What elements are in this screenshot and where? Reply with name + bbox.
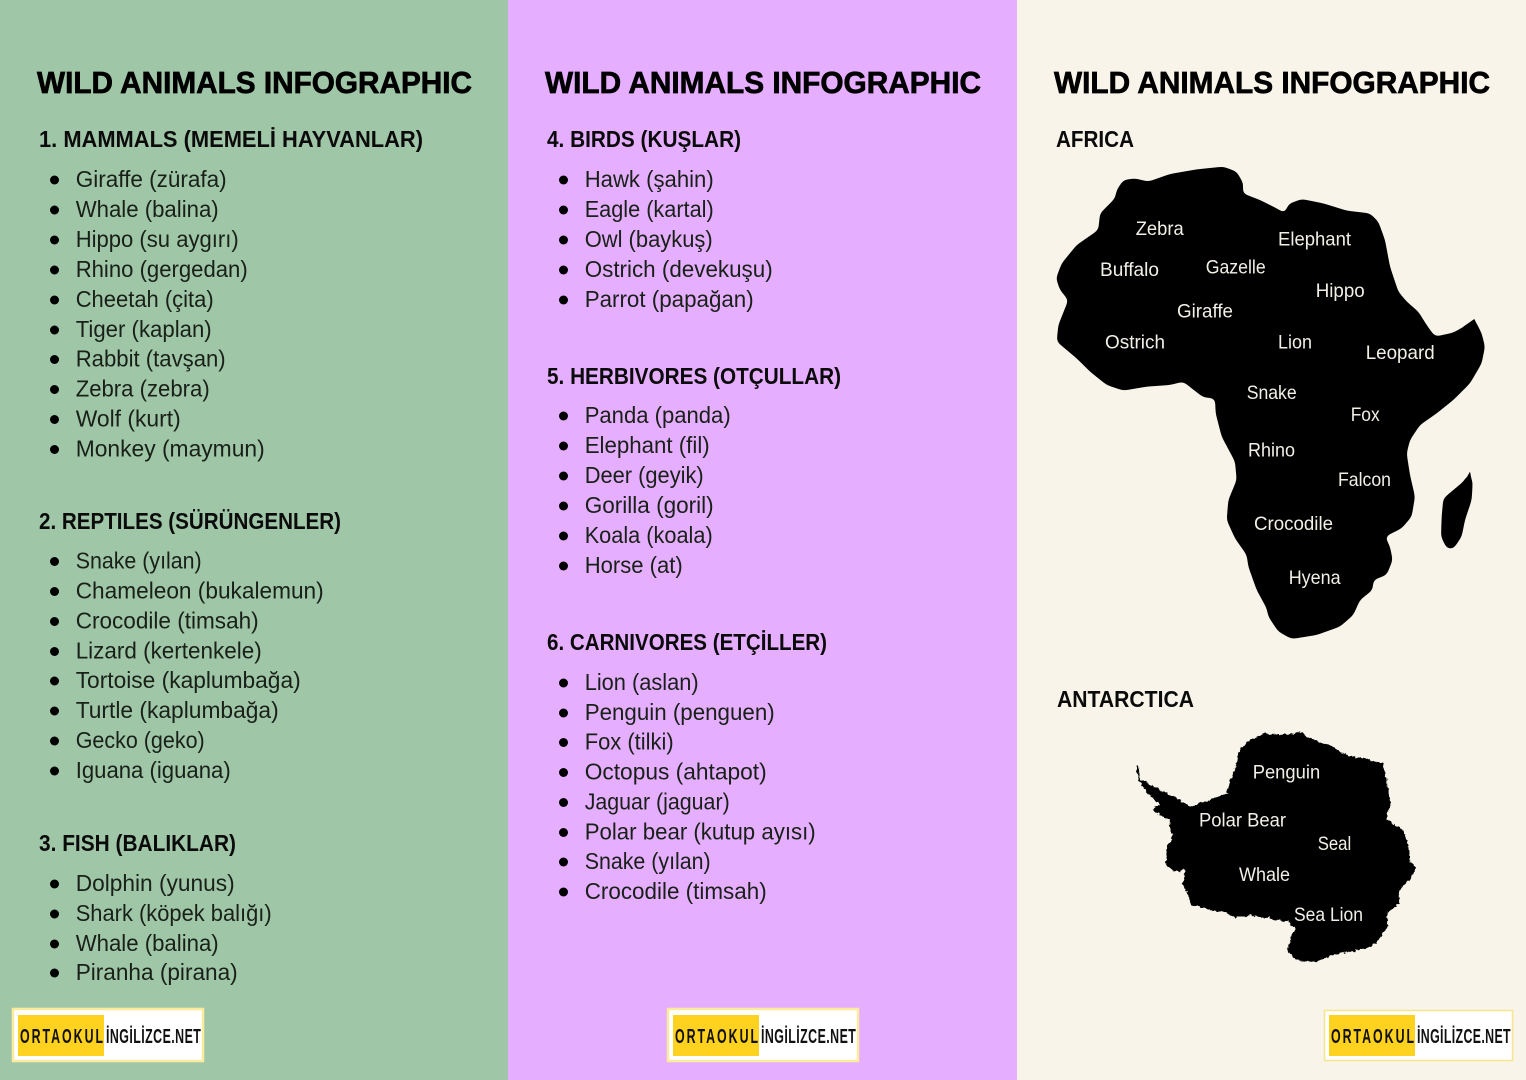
list: mammals: Zebra (zebra) — [76, 376, 210, 402]
map: antarctica: Polar Bear — [1199, 810, 1286, 832]
panel: birds, herbivores and carnivores — [508, 0, 1017, 1080]
list: mammals: Wolf (kurt) — [76, 406, 181, 432]
map: africa: Rhino — [1248, 440, 1295, 462]
list: fish: Dolphin (yunus) — [76, 870, 235, 896]
list: carnivores: Penguin (penguen) — [585, 699, 775, 725]
list: reptiles — [50, 548, 324, 783]
panel: continents — [1017, 0, 1526, 1080]
map: africa: Leopard — [1366, 342, 1435, 364]
list: herbivores: Elephant (fil) — [585, 432, 710, 458]
map: africa: Zebra — [1136, 218, 1184, 240]
map: antarctica — [1137, 733, 1416, 962]
logo: right — [1324, 1010, 1512, 1060]
list: mammals: Hippo (su aygırı) — [76, 226, 239, 252]
list: reptiles: Gecko (geko) — [76, 727, 205, 753]
list: reptiles: Tortoise (kaplumbağa) — [76, 667, 301, 693]
logo: left: ORTAOKUL — [20, 1025, 103, 1048]
map: africa: Giraffe — [1177, 301, 1233, 323]
list: fish: Whale (balina) — [76, 930, 219, 956]
map: antarctica: Sea Lion — [1294, 904, 1363, 926]
list: herbivores: Horse (at) — [585, 552, 683, 578]
list: carnivores: Crocodile (timsah) — [585, 878, 767, 904]
map: africa: Buffalo — [1100, 259, 1159, 281]
panel: mammals, reptiles and fish — [0, 0, 508, 1080]
list: herbivores: Gorilla (goril) — [585, 492, 714, 518]
list: mammals: Tiger (kaplan) — [76, 316, 212, 342]
list: herbivores: Panda (panda) — [585, 402, 731, 428]
logo: middle: İNGİLİZCE.NET — [761, 1025, 856, 1048]
map: africa: Hippo — [1316, 280, 1365, 302]
heading: africa: AFRICA — [1056, 126, 1134, 152]
heading: fish: 3. FISH (BALIKLAR) — [39, 830, 236, 856]
list: mammals — [50, 166, 265, 462]
list: reptiles: Snake (yılan) — [76, 548, 202, 574]
map: africa: Crocodile — [1254, 513, 1333, 535]
map: africa: Falcon — [1338, 469, 1391, 491]
list: mammals: Whale (balina) — [76, 196, 219, 222]
logo: middle: ORTAOKUL — [675, 1025, 758, 1048]
map: africa: Elephant — [1278, 229, 1352, 251]
list: birds: Eagle (kartal) — [585, 196, 714, 222]
logo: right: İNGİLİZCE.NET — [1417, 1025, 1511, 1048]
heading: herbivores: 5. HERBIVORES (OTÇULLAR) — [547, 363, 841, 389]
title: WILD ANIMALS INFOGRAPHIC — [1054, 66, 1490, 100]
list: fish: Shark (köpek balığı) — [76, 900, 272, 926]
map: africa: Lion — [1278, 332, 1312, 354]
map: antarctica: Penguin — [1253, 762, 1320, 784]
list: birds: Ostrich (devekuşu) — [585, 256, 773, 282]
map: africa: Fox — [1351, 404, 1380, 426]
map: africa: Ostrich — [1105, 332, 1165, 354]
heading: mammals: 1. MAMMALS (MEMELİ HAYVANLAR) — [39, 126, 423, 152]
list: mammals: Monkey (maymun) — [76, 436, 265, 462]
map: africa: Hyena — [1289, 567, 1341, 589]
logo: right: ORTAOKUL — [1331, 1025, 1414, 1048]
list: herbivores — [559, 402, 731, 578]
list: birds — [559, 166, 773, 312]
logo: left — [13, 1009, 203, 1061]
title: WILD ANIMALS INFOGRAPHIC — [37, 66, 472, 100]
heading: reptiles: 2. REPTILES (SÜRÜNGENLER) — [39, 508, 341, 534]
map: antarctica: Whale — [1239, 864, 1290, 886]
list: carnivores: Octopus (ahtapot) — [585, 758, 767, 784]
list: mammals: Rhino (gergedan) — [76, 256, 248, 282]
list: carnivores — [559, 669, 816, 904]
list: carnivores: Fox (tilki) — [585, 728, 674, 754]
list: reptiles: Turtle (kaplumbağa) — [76, 697, 279, 723]
heading: birds: 4. BIRDS (KUŞLAR) — [547, 126, 741, 152]
list: mammals: Cheetah (çita) — [76, 286, 214, 312]
heading: carnivores: 6. CARNIVORES (ETÇİLLER) — [547, 629, 827, 655]
list: reptiles: Lizard (kertenkele) — [76, 638, 262, 664]
list: reptiles: Iguana (iguana) — [76, 757, 231, 783]
title: WILD ANIMALS INFOGRAPHIC — [545, 66, 981, 100]
list: mammals: Giraffe (zürafa) — [76, 166, 227, 192]
list: mammals: Rabbit (tavşan) — [76, 346, 226, 372]
map: africa — [1056, 167, 1485, 639]
list: carnivores: Lion (aslan) — [585, 669, 699, 695]
list: fish: Piranha (pirana) — [76, 959, 238, 985]
list: carnivores: Jaguar (jaguar) — [585, 788, 730, 814]
list: carnivores: Snake (yılan) — [585, 848, 711, 874]
logo: left: İNGİLİZCE.NET — [106, 1025, 201, 1048]
map: antarctica: Seal — [1318, 833, 1351, 855]
list: fish — [50, 870, 272, 985]
list: birds: Owl (baykuş) — [585, 226, 713, 252]
map: africa: Gazelle — [1206, 257, 1266, 279]
list: birds: Hawk (şahin) — [585, 166, 714, 192]
list: reptiles: Crocodile (timsah) — [76, 608, 259, 634]
heading: antarctica: ANTARCTICA — [1057, 686, 1194, 712]
list: herbivores: Koala (koala) — [585, 522, 713, 548]
list: carnivores: Polar bear (kutup ayısı) — [585, 818, 816, 844]
logo: middle — [668, 1009, 858, 1061]
map: africa: Snake — [1247, 382, 1297, 404]
list: herbivores: Deer (geyik) — [585, 462, 704, 488]
list: birds: Parrot (papağan) — [585, 286, 754, 312]
list: reptiles: Chameleon (bukalemun) — [76, 578, 324, 604]
